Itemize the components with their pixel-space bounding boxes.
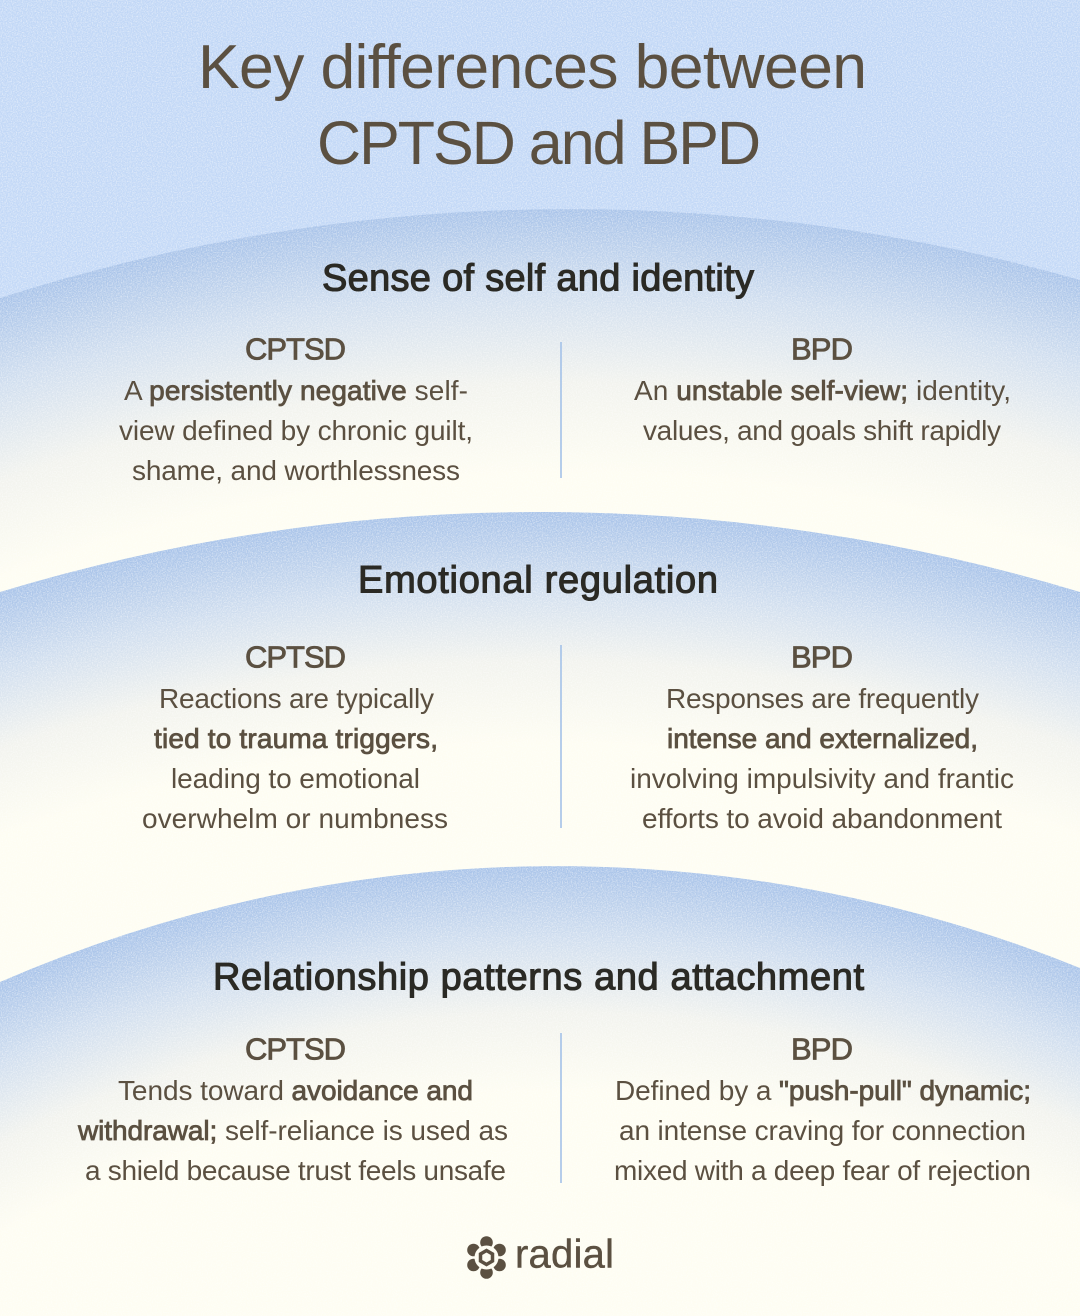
column: BPD emotional regulation: involving impulsivity and frantic (630, 763, 1014, 794)
column: BPD sense of self: An unstable self-view; identity, (634, 375, 1011, 406)
column: BPD emotional regulation: intense and externalized, (667, 723, 978, 754)
column: CPTSD emotional regulation: Reactions are typically (159, 683, 434, 714)
column: BPD relationships: Defined by a "push-pull" dynamic; (615, 1075, 1031, 1106)
column: CPTSD relationships: CPTSD (245, 1032, 346, 1066)
column: CPTSD emotional regulation (142, 640, 448, 834)
column: BPD sense of self: BPD (791, 332, 853, 366)
column: CPTSD sense of self: view defined by chronic guilt, (119, 415, 473, 446)
column: BPD relationships: mixed with a deep fear of rejection (614, 1155, 1031, 1186)
logo: radial: radial (515, 1232, 614, 1276)
arc band: emotional regulation (0, 512, 1080, 1316)
column: CPTSD emotional regulation: leading to emotional (171, 763, 420, 794)
title: Key differences between (198, 32, 867, 102)
column: BPD relationships: an intense craving for connection (619, 1115, 1026, 1146)
column: CPTSD emotional regulation: tied to trauma triggers, (154, 723, 438, 754)
heading: relationship patterns: Relationship patterns and attachment (213, 956, 864, 998)
column: BPD sense of self: values, and goals shift rapidly (643, 415, 1001, 446)
column: CPTSD emotional regulation: overwhelm or numbness (142, 803, 448, 834)
column: CPTSD emotional regulation: CPTSD (245, 640, 346, 674)
arc band: relationship patterns (0, 866, 1080, 1316)
column: BPD emotional regulation (630, 640, 1014, 834)
column: CPTSD relationships: Tends toward avoidance and (118, 1075, 473, 1106)
panel: sense of self and identity (119, 258, 1011, 486)
title: CPTSD and BPD (317, 109, 761, 177)
logo: radial (467, 1232, 614, 1279)
column: BPD emotional regulation: efforts to avoid abandonment (642, 803, 1002, 834)
panel: relationship patterns and attachment (77, 956, 1031, 1186)
column: CPTSD sense of self: CPTSD (245, 332, 346, 366)
column: CPTSD sense of self: shame, and worthlessness (132, 455, 460, 486)
heading: emotional regulation: Emotional regulation (358, 560, 718, 602)
title (198, 32, 867, 177)
column: BPD sense of self (634, 332, 1011, 446)
column: BPD relationships: BPD (791, 1032, 853, 1066)
column: CPTSD sense of self (119, 332, 473, 486)
column: CPTSD sense of self: A persistently negative self- (124, 375, 468, 406)
column: BPD relationships (614, 1032, 1031, 1186)
panel: emotional regulation (142, 560, 1014, 834)
column: CPTSD relationships: a shield because trust feels unsafe (85, 1155, 506, 1186)
icon: radial flower (467, 1236, 506, 1279)
column: CPTSD relationships (77, 1032, 508, 1186)
column: BPD emotional regulation: Responses are frequently (666, 683, 979, 714)
column: CPTSD relationships: withdrawal; self-reliance is used as (77, 1115, 508, 1146)
heading: sense of self: Sense of self and identity (322, 258, 754, 300)
column: BPD emotional regulation: BPD (791, 640, 853, 674)
